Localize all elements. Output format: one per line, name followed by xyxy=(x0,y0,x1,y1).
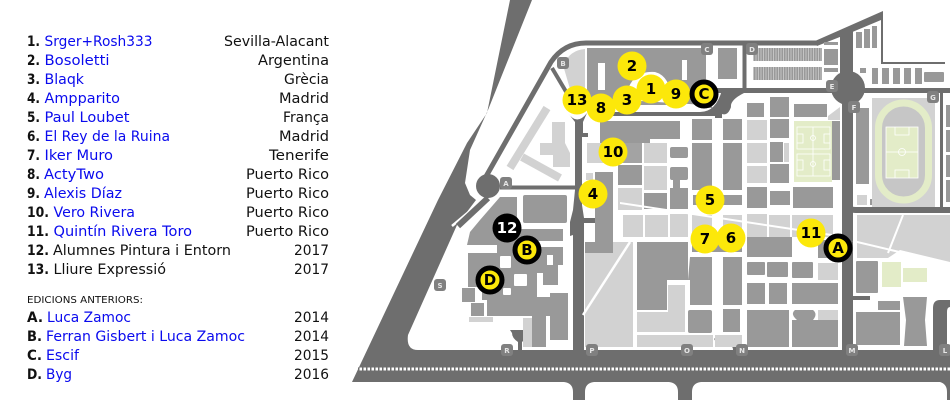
row 13 xyxy=(27,262,329,278)
marker 2 xyxy=(618,52,646,80)
row 5: 5. xyxy=(27,110,40,126)
road badges: C xyxy=(704,46,710,54)
row 5 xyxy=(27,110,329,126)
road badges: N xyxy=(739,347,745,355)
row 9: Puerto Rico xyxy=(246,186,329,202)
row 13: Lliure Expressió xyxy=(54,262,166,278)
row C: 2015 xyxy=(294,348,329,364)
row 3: Grècia xyxy=(284,72,329,88)
roads xyxy=(352,0,950,400)
marker 13 xyxy=(562,86,592,114)
row 6: 6. xyxy=(27,129,40,145)
row 10 xyxy=(27,205,329,221)
marker 3: 3 xyxy=(622,91,632,109)
marker 4 xyxy=(578,180,608,208)
row 1: 1. xyxy=(27,34,40,50)
row 7: 7. xyxy=(27,148,40,164)
row 11: Puerto Rico xyxy=(246,224,329,240)
row 2 xyxy=(27,53,329,69)
marker 11: 11 xyxy=(801,224,821,242)
marker 6: 6 xyxy=(726,229,736,247)
marker 5 xyxy=(696,186,724,214)
marker 4: 4 xyxy=(588,185,598,203)
row 12: 12. xyxy=(27,243,49,259)
marker D: D xyxy=(484,271,496,289)
row 11: Quintín Rivera Toro xyxy=(54,224,192,240)
row 4: 4. xyxy=(27,91,40,107)
row B: 2014 xyxy=(294,329,329,345)
row 1: Srger+Rosh333 xyxy=(44,34,152,50)
marker 8: 8 xyxy=(596,99,606,117)
row 8: ActyTwo xyxy=(44,167,104,183)
row 1 xyxy=(27,34,329,50)
marker B: B xyxy=(521,241,533,259)
row 6 xyxy=(27,129,329,145)
row 3: Blaqk xyxy=(44,72,85,88)
row A: Luca Zamoc xyxy=(47,310,131,326)
green football field xyxy=(794,121,832,182)
row 7: Iker Muro xyxy=(44,148,113,164)
marker 13: 13 xyxy=(567,91,587,109)
row C xyxy=(27,348,329,364)
row 3: 3. xyxy=(27,72,40,88)
row 2: Bosoletti xyxy=(44,53,110,69)
marker C xyxy=(692,82,716,106)
marker 6 xyxy=(716,224,746,252)
sports field xyxy=(872,98,935,207)
row C: C. xyxy=(27,348,42,364)
marker 3 xyxy=(612,86,642,114)
row 13: 13. xyxy=(27,262,49,278)
marker 8 xyxy=(586,94,616,122)
row 5: Paul Loubet xyxy=(44,110,130,126)
row 2: 2. xyxy=(27,53,40,69)
marker 11 xyxy=(796,218,826,248)
row 12 xyxy=(27,243,329,259)
marker 10: 10 xyxy=(603,143,623,161)
marker 10 xyxy=(598,138,628,166)
row 10: Puerto Rico xyxy=(246,205,329,221)
road badges: F xyxy=(852,104,857,112)
row A xyxy=(27,310,329,326)
row 1: Sevilla-Alacant xyxy=(224,34,329,50)
road badges: A xyxy=(503,180,509,188)
road badges: G xyxy=(930,94,936,102)
marker 2: 2 xyxy=(627,57,637,75)
row 8: 8. xyxy=(27,167,40,183)
marker 12: 12 xyxy=(497,219,517,237)
row D: 2016 xyxy=(294,367,329,383)
row 9: 9. xyxy=(27,186,40,202)
row 3 xyxy=(27,72,329,88)
row C: Escif xyxy=(46,348,80,364)
road badges: O xyxy=(684,347,690,355)
row B: Ferran Gisbert i Luca Zamoc xyxy=(46,329,245,345)
row 11: 11. xyxy=(27,224,49,240)
row 11 xyxy=(27,224,329,240)
marker 5: 5 xyxy=(705,191,715,209)
triangle campus xyxy=(510,108,560,178)
row A: 2014 xyxy=(294,310,329,326)
row 6: Madrid xyxy=(279,129,329,145)
marker 7: 7 xyxy=(700,230,710,248)
row 5: França xyxy=(283,110,329,126)
row B: B. xyxy=(27,329,42,345)
road badges: D xyxy=(749,46,755,54)
row 7 xyxy=(27,148,329,164)
marker 1 xyxy=(636,74,666,104)
row 2: Argentina xyxy=(258,53,329,69)
subheading: previous editions: EDICIONS ANTERIORS: xyxy=(27,295,143,306)
road badges: E xyxy=(830,83,835,91)
road badges: R xyxy=(504,347,510,355)
road badges: L xyxy=(943,347,948,355)
south-central blocks xyxy=(585,242,633,347)
legend: artists list xyxy=(27,34,329,383)
row 7: Tenerife xyxy=(268,148,329,164)
row 4: Madrid xyxy=(279,91,329,107)
row 6: El Rey de la Ruina xyxy=(44,129,170,145)
road badges: M xyxy=(849,347,856,355)
marker C: C xyxy=(698,85,710,103)
row D xyxy=(27,367,329,383)
marker 12 xyxy=(492,214,522,242)
row 4: Ampparito xyxy=(44,91,120,107)
marker 7 xyxy=(690,224,720,254)
road badges: S xyxy=(437,282,443,290)
marker D xyxy=(478,268,502,292)
row 10: 10. xyxy=(27,205,49,221)
row D: D. xyxy=(27,367,42,383)
row 8: Puerto Rico xyxy=(246,167,329,183)
buildings xyxy=(462,26,950,347)
row B xyxy=(27,329,329,345)
road badges xyxy=(434,43,950,356)
row 12: 2017 xyxy=(294,243,329,259)
row A: A. xyxy=(27,310,43,326)
marker A xyxy=(826,236,850,260)
row 4 xyxy=(27,91,329,107)
marker B xyxy=(515,238,539,262)
map xyxy=(352,0,950,400)
row 13: 2017 xyxy=(294,262,329,278)
row 8 xyxy=(27,167,329,183)
road badges: P xyxy=(589,347,595,355)
row D: Byg xyxy=(46,367,72,383)
marker 1: 1 xyxy=(646,80,656,98)
row 10: Vero Rivera xyxy=(54,205,135,221)
row 12: Alumnes Pintura i Entorn xyxy=(53,243,231,259)
marker A: A xyxy=(832,239,844,257)
road badges: B xyxy=(560,60,566,68)
row 9 xyxy=(27,186,329,202)
left campus xyxy=(467,197,563,347)
row 9: Alexis Díaz xyxy=(44,186,122,202)
marker 9: 9 xyxy=(671,85,681,103)
marker 9 xyxy=(662,80,690,108)
